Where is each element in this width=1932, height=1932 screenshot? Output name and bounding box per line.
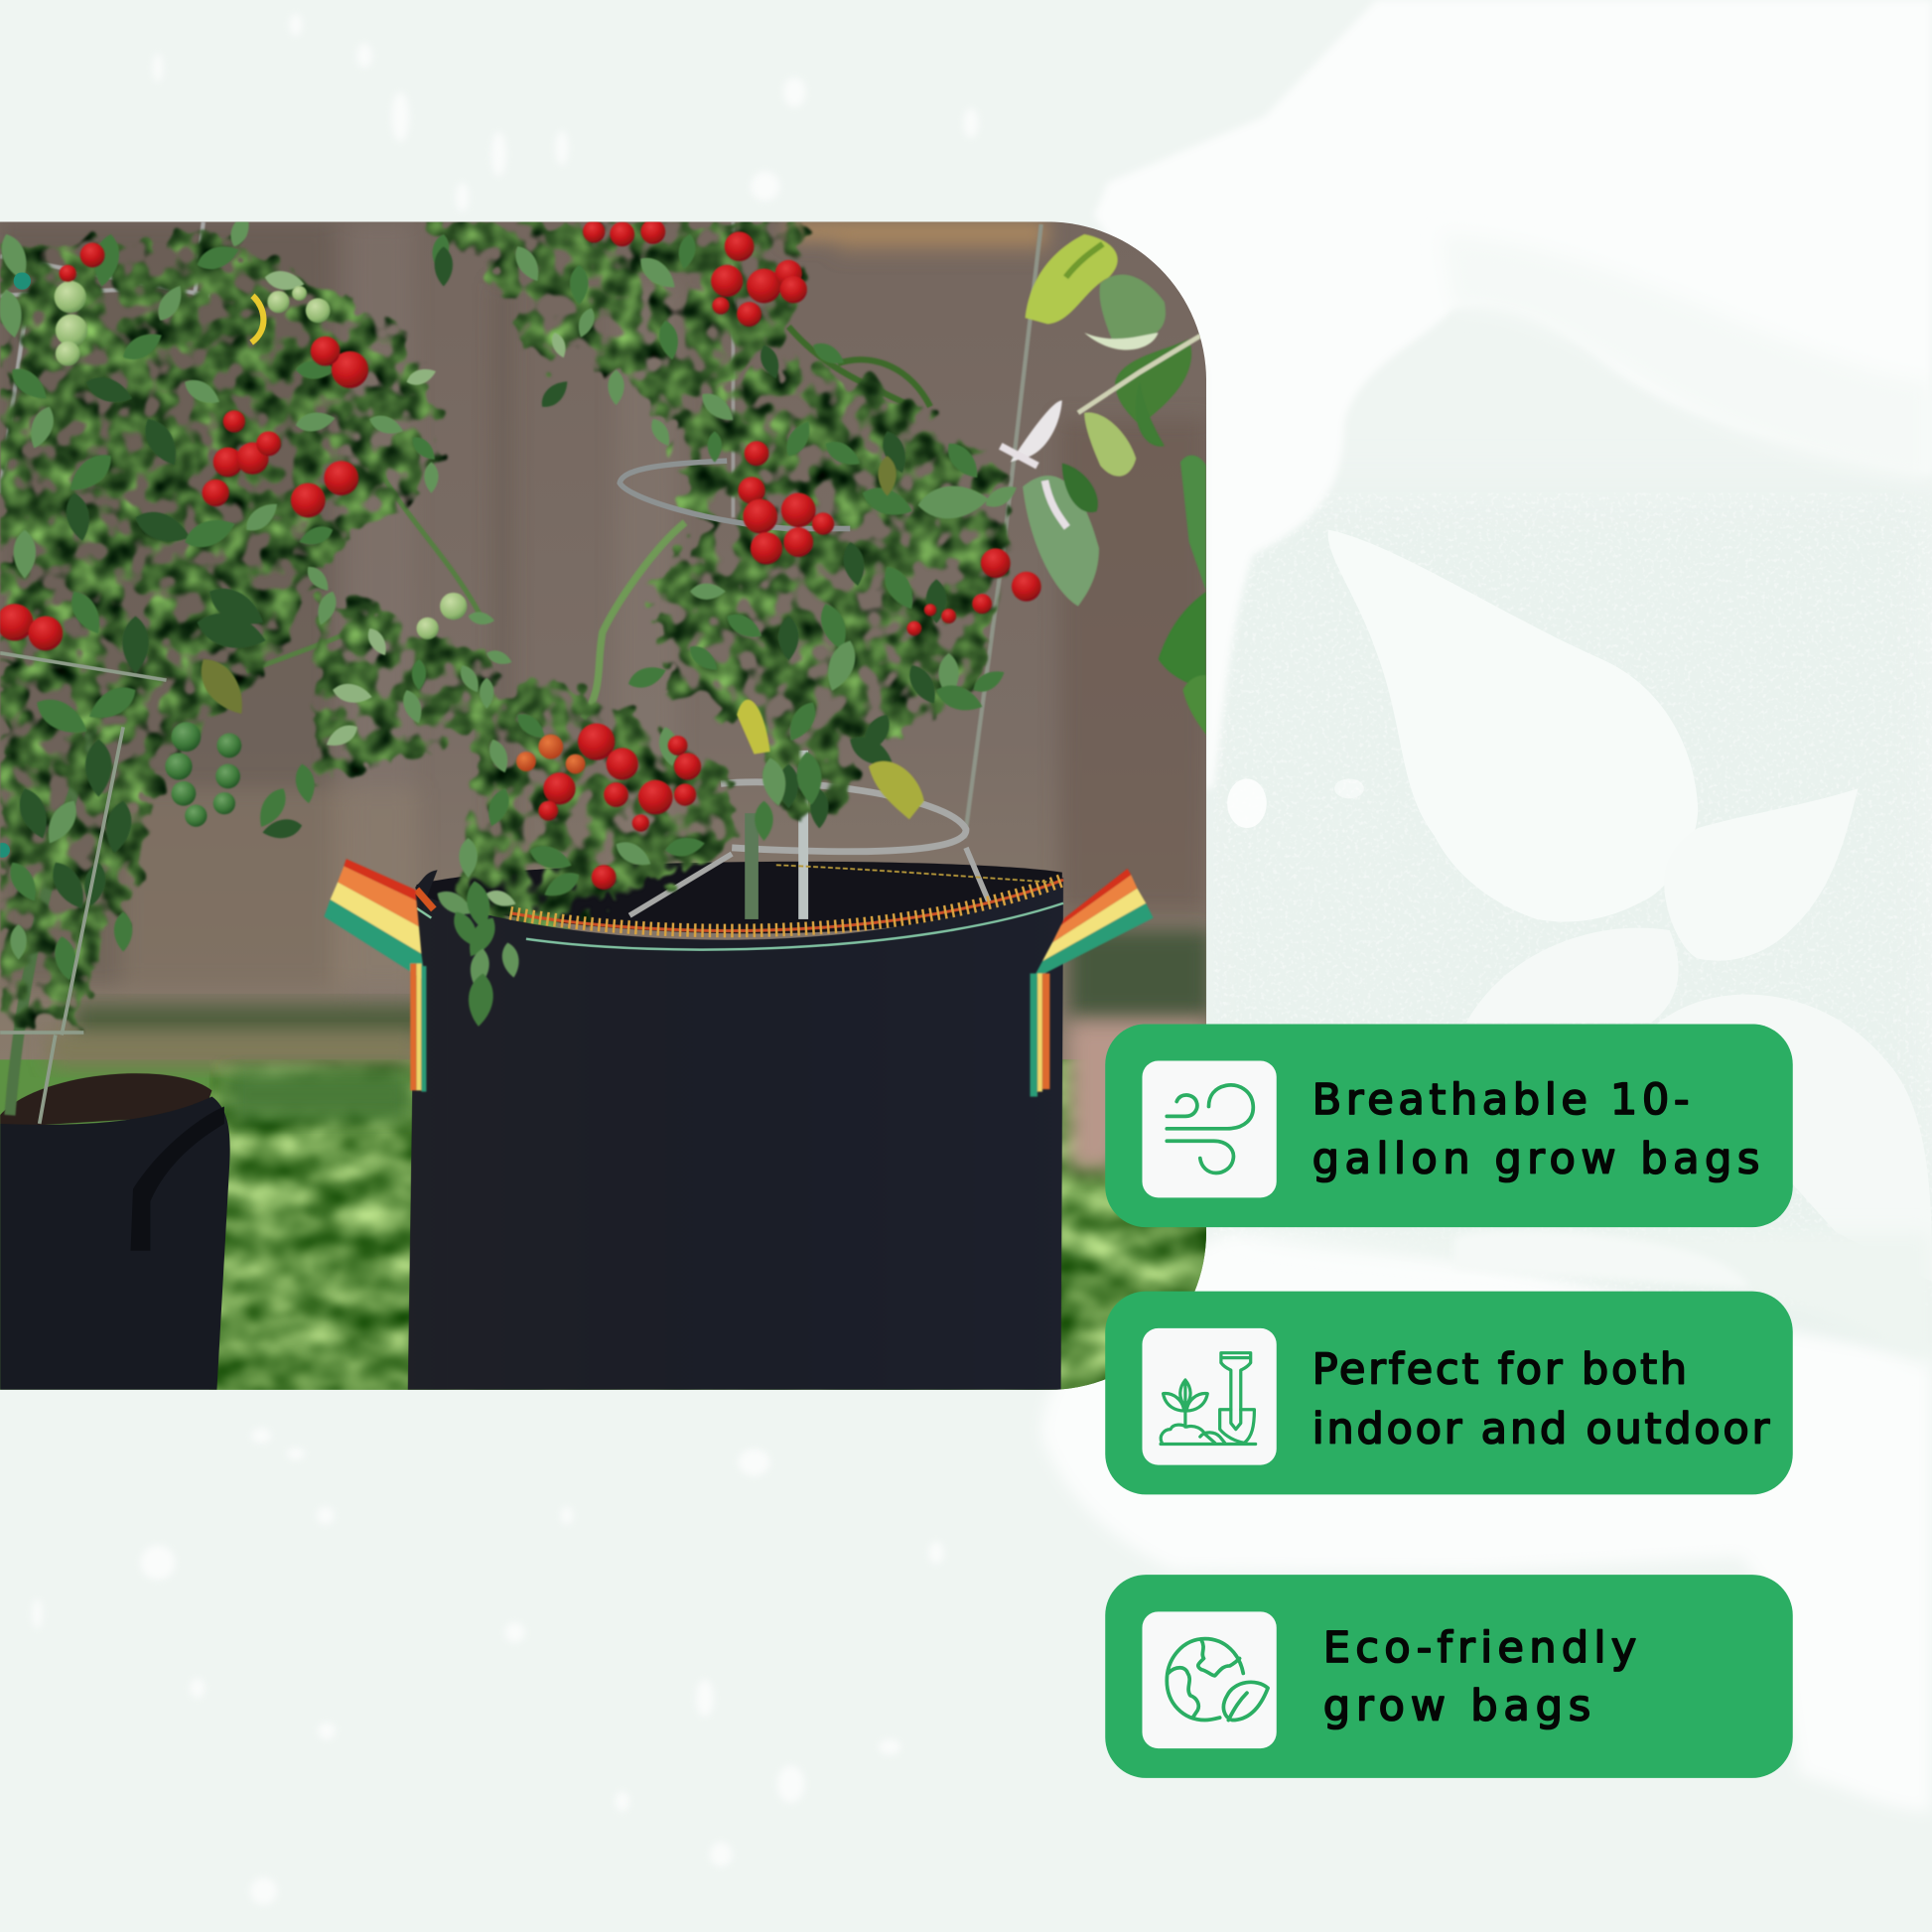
text: perfect for both indoor and outdoor: Perfect for both xyxy=(1312,1345,1687,1395)
card 3: eco-friendly xyxy=(1105,1575,1793,1778)
top tomato cage ring xyxy=(620,461,850,528)
left cage wires in front of leaves xyxy=(0,653,167,1124)
text: breathable 10-gallon grow bags: Breathable 10- xyxy=(1312,1075,1690,1125)
text: perfect for both indoor and outdoor: indoor and outdoor xyxy=(1312,1404,1770,1453)
text: breathable 10-gallon grow bags xyxy=(1312,1075,1759,1183)
red and green tomatoes xyxy=(0,219,1041,890)
individual leaves xyxy=(0,210,1021,982)
main grow bag body xyxy=(408,865,1063,1390)
text: perfect for both indoor and outdoor xyxy=(1312,1345,1770,1453)
icon: shovel and seedling xyxy=(1142,1328,1277,1465)
lawn and hedge xyxy=(0,930,1213,1392)
left rainbow handle xyxy=(324,859,426,1092)
yellow plant clip and teal tie xyxy=(0,272,263,858)
text: breathable 10-gallon grow bags: gallon grow bags xyxy=(1312,1134,1759,1183)
foliage texture masses xyxy=(0,221,1011,1023)
text: eco-friendly grow bags xyxy=(1323,1623,1636,1731)
wooden fence backdrop xyxy=(0,221,1213,1084)
text: eco-friendly grow bags: grow bags xyxy=(1323,1682,1590,1731)
bag interior xyxy=(416,862,1062,933)
plant stems xyxy=(10,327,930,1115)
right rainbow handle xyxy=(1031,869,1154,1097)
card 1: breathable xyxy=(1105,1024,1793,1227)
wire cages xyxy=(0,221,1041,838)
icon: wind xyxy=(1142,1061,1277,1197)
photo: tomato plants in fabric grow bags xyxy=(0,210,1213,1392)
variegated leaves at right xyxy=(1001,234,1213,746)
lower tomato cage xyxy=(629,751,990,919)
foliage draped over the bag rim xyxy=(433,879,522,1028)
left grow bag xyxy=(0,1073,230,1390)
icon: globe with leaf xyxy=(1142,1611,1277,1748)
text: eco-friendly grow bags: Eco-friendly xyxy=(1323,1623,1636,1673)
card 2: indoor and outdoor xyxy=(1105,1292,1793,1494)
